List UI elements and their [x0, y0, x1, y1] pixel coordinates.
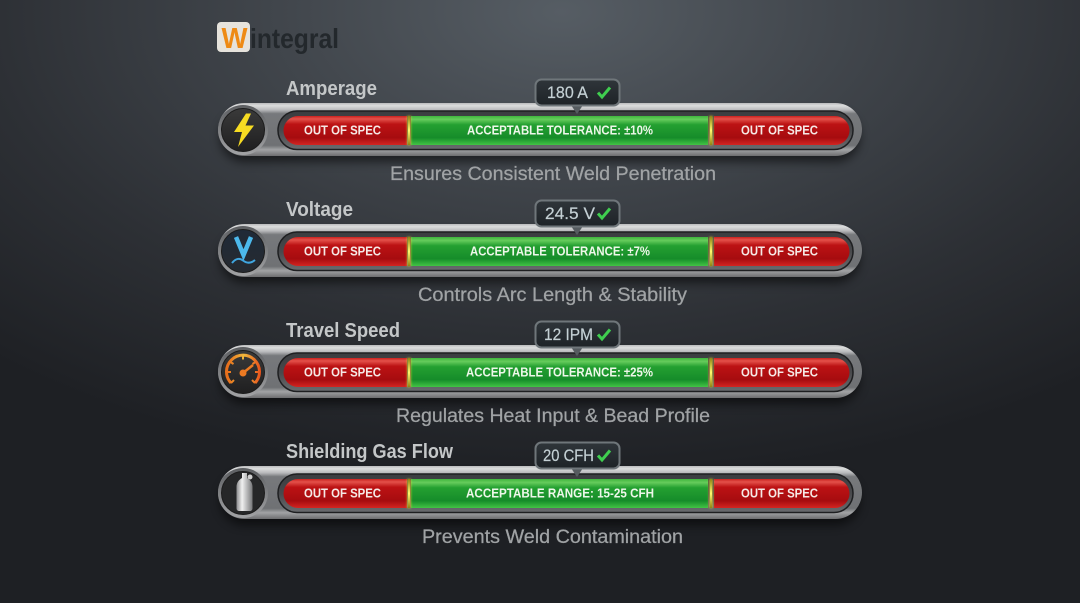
right out of spec zone: [714, 479, 850, 508]
acceptable zone: ACCEPTABLE TOLERANCE: ±10%: [467, 124, 653, 138]
acceptable zone: ACCEPTABLE TOLERANCE: ±7%: [470, 244, 650, 258]
value tag: [536, 322, 620, 356]
right out of spec zone: OUT OF SPEC: [741, 124, 818, 138]
logo: W: [222, 23, 248, 55]
heading: voltage: Voltage: [286, 199, 353, 221]
left out of spec zone: OUT OF SPEC: [304, 366, 381, 380]
value tag: 180 A: [547, 84, 588, 102]
left out of spec zone: [284, 358, 407, 387]
caption: Ensures Consistent Weld Penetration: [390, 164, 716, 185]
value tag: 12 IPM: [544, 326, 593, 344]
acceptable zone: [411, 479, 708, 508]
gauge bar: amperage: [218, 103, 862, 162]
gauge bar: shielding gas flow: [218, 466, 862, 525]
panel: shielding gas flow: [218, 441, 862, 548]
panel: travel speed: [218, 320, 862, 427]
gauge bar: travel speed: [218, 345, 862, 404]
left out of spec zone: OUT OF SPEC: [304, 244, 381, 258]
left out of spec zone: [284, 237, 407, 266]
left out of spec zone: [284, 479, 407, 508]
caption: Regulates Heat Input & Bead Profile: [396, 406, 710, 427]
logo: [217, 22, 339, 55]
value tag: 24.5 V: [545, 205, 595, 223]
heading: travel speed: Travel Speed: [286, 320, 400, 342]
gauge bar: voltage: [218, 224, 862, 283]
right out of spec zone: OUT OF SPEC: [741, 244, 818, 258]
value tag: [536, 200, 620, 235]
right out of spec zone: OUT OF SPEC: [741, 366, 818, 380]
panel: amperage: [218, 78, 862, 185]
right out of spec zone: [714, 116, 850, 145]
acceptable zone: [411, 358, 708, 387]
left out of spec zone: OUT OF SPEC: [304, 124, 381, 138]
right out of spec zone: [714, 237, 850, 266]
value tag: [536, 80, 620, 114]
icon: voltage V: [218, 226, 268, 276]
icon: lightning bolt: [218, 105, 268, 155]
panel: voltage: [218, 199, 862, 306]
right out of spec zone: [714, 358, 850, 387]
acceptable zone: [411, 116, 708, 145]
heading: shielding gas flow: Shielding Gas Flow: [286, 441, 453, 463]
acceptable zone: ACCEPTABLE TOLERANCE: ±25%: [466, 366, 653, 380]
right out of spec zone: OUT OF SPEC: [741, 486, 818, 500]
icon: gas cylinder: [218, 468, 268, 518]
value tag: [536, 442, 620, 477]
heading: amperage: Amperage: [286, 78, 377, 100]
acceptable zone: ACCEPTABLE RANGE: 15-25 CFH: [466, 486, 654, 500]
left out of spec zone: [284, 116, 407, 145]
value tag: 20 CFH: [543, 447, 594, 465]
logo: integral: [250, 23, 339, 54]
left out of spec zone: OUT OF SPEC: [304, 486, 381, 500]
caption: Prevents Weld Contamination: [422, 527, 683, 548]
acceptable zone: [411, 237, 708, 266]
icon: speedometer: [218, 347, 268, 397]
caption: Controls Arc Length & Stability: [418, 285, 688, 306]
